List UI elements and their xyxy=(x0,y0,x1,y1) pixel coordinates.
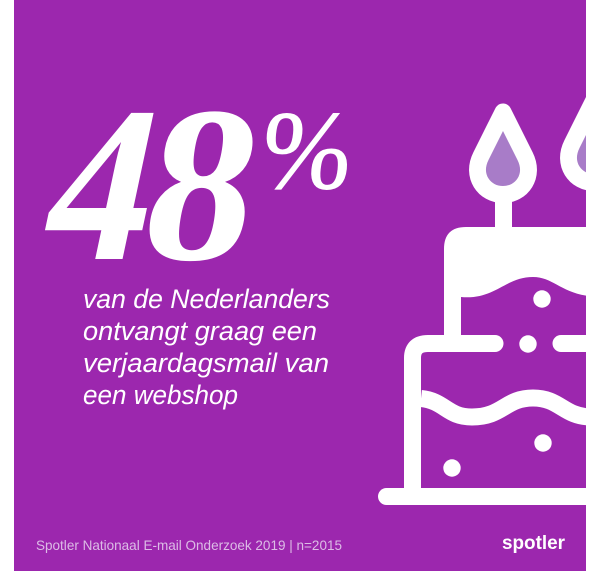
upper cake tier xyxy=(444,227,586,335)
candle flame left xyxy=(478,112,528,230)
text block: description: ontvangt graag een xyxy=(83,316,317,346)
statistic: 48 percent xyxy=(26,61,358,308)
lower cake tier xyxy=(386,335,600,496)
text block: description: verjaardagsmail van xyxy=(83,348,329,378)
percent sign: % xyxy=(255,89,358,213)
text block: description xyxy=(83,284,330,410)
logo: spotler: spotler xyxy=(502,532,565,554)
icon: birthday cake xyxy=(386,100,600,496)
text block: description: van de Nederlanders xyxy=(83,284,330,314)
candle flame right xyxy=(560,97,586,190)
digit 8: 8 xyxy=(129,62,276,308)
digit 4: 4 xyxy=(26,61,182,307)
text block: description: een webshop xyxy=(83,380,238,410)
source note: Spotler Nationaal E-mail Onderzoek 2019 | n=2015 xyxy=(36,537,342,553)
